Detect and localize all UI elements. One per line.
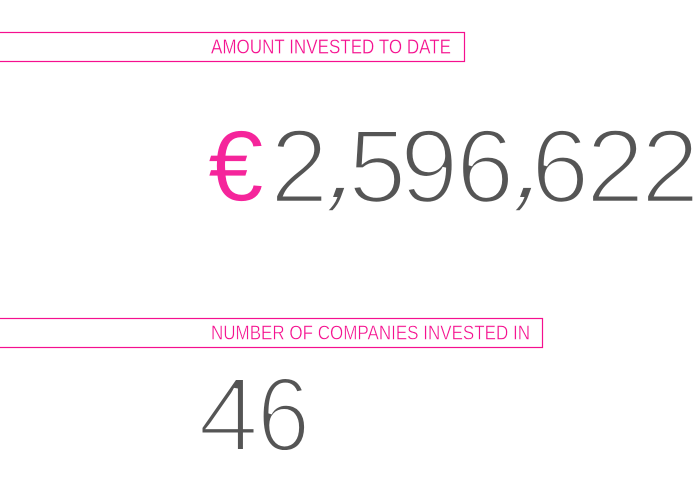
companies value: 4: [198, 355, 259, 474]
companies value: 6: [257, 356, 310, 474]
amount value: [270, 104, 699, 226]
companies value: [198, 355, 310, 474]
panel: companies heading: [0, 318, 542, 348]
panel: companies heading: NUMBER OF COMPANIES INVESTED IN: [211, 322, 530, 344]
euro symbol: €: [208, 110, 264, 222]
amount value: 622: [531, 108, 699, 226]
amount value: ,: [314, 104, 385, 220]
panel: amount invested heading: [0, 32, 464, 62]
amount value: ,: [501, 104, 572, 220]
amount value: 2: [270, 108, 328, 226]
amount value: 596: [348, 108, 514, 226]
panel: amount invested heading: AMOUNT INVESTED TO DATE: [211, 36, 451, 58]
